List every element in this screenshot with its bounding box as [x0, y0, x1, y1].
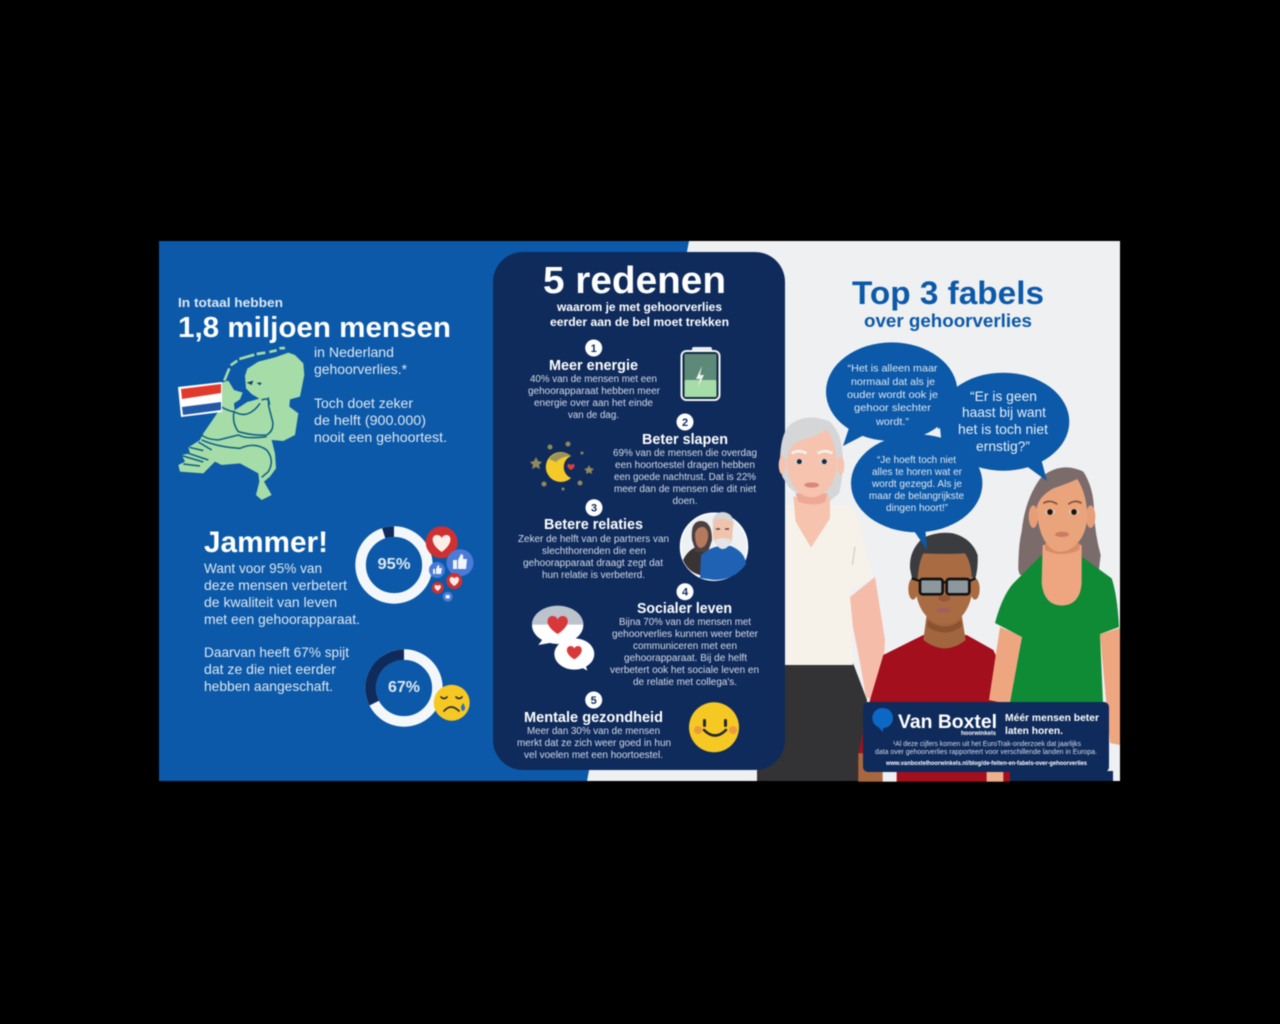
reason 1 text: van de dag.: [568, 410, 619, 421]
reason 3 heading: Betere relaties: [544, 517, 643, 533]
bubble: niet alles horen: dingen hoort!”: [886, 502, 948, 514]
reason 4 text: gehoorverlies kunnen weer beter: [612, 629, 759, 640]
reason 5 text: merkt dat ze zich weer goed in hun: [517, 738, 671, 749]
bubble: normaal: ouder wordt ook je: [847, 389, 938, 401]
reason 4 text: de relatie met collega's.: [633, 677, 737, 688]
bubble: normaal: “Het is alleen maar: [848, 362, 938, 374]
intro text block: gehoorverlies.*: [314, 361, 408, 377]
reason 1 text: 40% van de mensen met een: [530, 374, 657, 385]
number badge 1: [585, 340, 602, 356]
icon: older couple portrait: [680, 512, 748, 580]
number badge 2: [676, 414, 694, 430]
bubble: normaal: gehoor slechter: [854, 402, 932, 414]
bubble: niet alles horen: alles te horen wat er: [872, 466, 962, 478]
intro text block: Toch doet zeker: [314, 395, 413, 411]
main heading: 1,8 miljoen mensen: [178, 312, 451, 344]
reason 5 text: [517, 726, 671, 761]
reason 1 text: gehoorapparaat hebben meer: [528, 386, 661, 397]
reason 5 text: Meer dan 30% van de mensen: [527, 726, 660, 737]
reason 2 heading: Beter slapen: [642, 432, 728, 448]
number badge 3: [586, 499, 602, 516]
number badge 3: 3: [591, 503, 597, 515]
bubble: normaal: wordt.”: [875, 416, 910, 428]
intro text block: in Nederland: [314, 344, 394, 360]
number badge 2: 2: [682, 417, 688, 429]
panel heading: 5 redenen: [543, 260, 726, 302]
intro small heading: In totaal hebben: [178, 295, 283, 310]
chart: 67 percent donut: 67%: [388, 679, 420, 696]
reason 2 text: doen.: [672, 496, 698, 507]
reason 4 text: gehoorapparaat. Bij de helft: [624, 653, 747, 664]
text block 95 percent: deze mensen verbetert: [204, 577, 347, 593]
heading Jammer: Jammer!: [204, 526, 328, 559]
reason 1 heading: Meer energie: [549, 358, 638, 374]
person: woman in green: [989, 467, 1120, 781]
bubble: niet alles horen: [851, 428, 982, 550]
intro text block: nooit een gehoortest.: [314, 429, 447, 445]
website link: www.vanboxtelhoorwinkels.nl/blog/de-feiten-en-fabels-over-gehoorverlies: [885, 761, 1088, 767]
panel: Jammer statistics: [204, 526, 474, 721]
chart: 95 percent donut: [361, 532, 427, 598]
reason 1 text: [528, 374, 661, 421]
reason 3 text: [518, 534, 669, 581]
icon: smiley: [689, 702, 739, 752]
bubble: normaal: [826, 342, 957, 446]
reason 2 text: een hoortoestel dragen hebben: [615, 460, 755, 471]
chart: 95 percent donut: 95%: [378, 556, 410, 573]
number badge 4: 4: [682, 587, 689, 599]
icon: speech bubbles with hearts: [532, 606, 594, 671]
panel subheading: [550, 300, 729, 329]
reason 5 text: vel voelen met een hoortoestel.: [524, 750, 663, 761]
icon: likes and hearts: [426, 526, 474, 602]
panel: Top 3 fabels heading: [852, 275, 1044, 331]
bubble: niet alles horen: maar de belangrijkste: [869, 490, 964, 502]
logo wordmark: Van Boxtel: [898, 712, 997, 733]
bubble: niet alles horen: wordt gezegd. Als je: [871, 478, 962, 490]
reason 3: betere relaties: [518, 499, 748, 581]
reason 4 text: communiceren met een: [633, 641, 737, 652]
reason 1: meer energie: [528, 340, 720, 421]
number badge 5: [585, 692, 602, 708]
slogan: laten horen.: [1005, 725, 1063, 737]
icon: crying emoji: [434, 685, 470, 721]
bubble: normaal: normaal dat als je: [851, 376, 935, 388]
icon: Dutch flag: [178, 382, 222, 417]
map of the Netherlands: [178, 348, 304, 500]
source note: ¹Al deze cijfers komen uit het EuroTrak-onderzoek dat jaarlijks: [893, 741, 1081, 748]
icon: logo marker: [872, 708, 893, 732]
speech bubbles: [826, 342, 1069, 550]
text block 95 percent: met een gehoorapparaat.: [204, 611, 360, 627]
intro text block: [314, 344, 447, 445]
text block 95 percent: de kwaliteit van leven: [204, 594, 337, 610]
reason 1 text: energie over aan het einde: [534, 398, 653, 409]
reason 4 text: verbetert ook het sociale leven en: [610, 665, 759, 676]
source note: data over gehoorverlies rapporteert voor verschillende landen in Europa.: [875, 749, 1097, 756]
bubble: geen haast: ernstig?”: [976, 438, 1030, 454]
reason 4 text: [610, 617, 759, 688]
source note: [875, 741, 1097, 756]
slogan: [1005, 712, 1099, 737]
text block 95 percent: Want voor 95% van: [204, 560, 322, 576]
reason 2 text: [613, 448, 757, 507]
bubble: geen haast: [937, 373, 1069, 481]
text block 67 percent: hebben aangeschaft.: [204, 678, 333, 694]
bubble: geen haast: het is toch niet: [958, 421, 1048, 437]
panel: 5 redenen: [493, 252, 785, 770]
reason 2 text: meer dan de mensen die dit niet: [614, 484, 756, 495]
text block 67 percent: [204, 644, 349, 694]
person: man with glasses: [858, 533, 1017, 782]
reason 2: beter slapen: [530, 414, 757, 507]
bubble: geen haast: haast bij want: [962, 404, 1046, 420]
chart: 67 percent donut: [371, 655, 437, 721]
number badge 4: [676, 583, 694, 600]
reason 5 heading: Mentale gezondheid: [524, 710, 663, 726]
icon: battery: [682, 347, 720, 400]
reason 4 heading: Socialer leven: [637, 601, 732, 617]
text block 67 percent: dat ze die niet eerder: [204, 661, 336, 677]
reason 4: socialer leven: [532, 583, 759, 688]
reason 4 text: Bijna 70% van de mensen met: [619, 617, 751, 628]
reason 2 text: een goede nachtrust. Dat is 22%: [614, 472, 756, 483]
reason 3 text: Zeker de helft van de partners van: [518, 534, 669, 545]
reason 3 text: slechthorenden die een: [542, 546, 646, 557]
subtitle over gehoorverlies: over gehoorverlies: [864, 311, 1032, 331]
bubble: geen haast: “Er is geen: [970, 388, 1037, 404]
reason 5: mentale gezondheid: [517, 692, 739, 761]
logo subline: hoorwinkels: [961, 731, 997, 737]
bubble: niet alles horen: “Je hoeft toch niet: [877, 454, 956, 466]
person: older woman: [779, 417, 885, 781]
footer: Van Boxtel logo and source: [863, 702, 1109, 772]
panel subheading: waarom je met gehoorverlies: [556, 300, 722, 314]
text block 95 percent: [204, 560, 360, 627]
panel: 1,8 miljoen mensen: [178, 295, 451, 500]
icon: moon and stars: [530, 442, 594, 490]
slogan: Méér mensen beter: [1005, 712, 1099, 724]
panel subheading: eerder aan de bel moet trekken: [550, 315, 729, 329]
reason 3 text: hun relatie is verbeterd.: [542, 570, 645, 581]
reason 3 text: gehoorapparaat draagt zegt dat: [523, 558, 663, 569]
number badge 5: 5: [591, 695, 597, 707]
title Top 3 fabels: Top 3 fabels: [852, 275, 1044, 311]
reason 2 text: 69% van de mensen die overdag: [613, 448, 757, 459]
text block 67 percent: Daarvan heeft 67% spijt: [204, 644, 349, 660]
intro text block: de helft (900.000): [314, 412, 426, 428]
number badge 1: 1: [591, 343, 597, 355]
